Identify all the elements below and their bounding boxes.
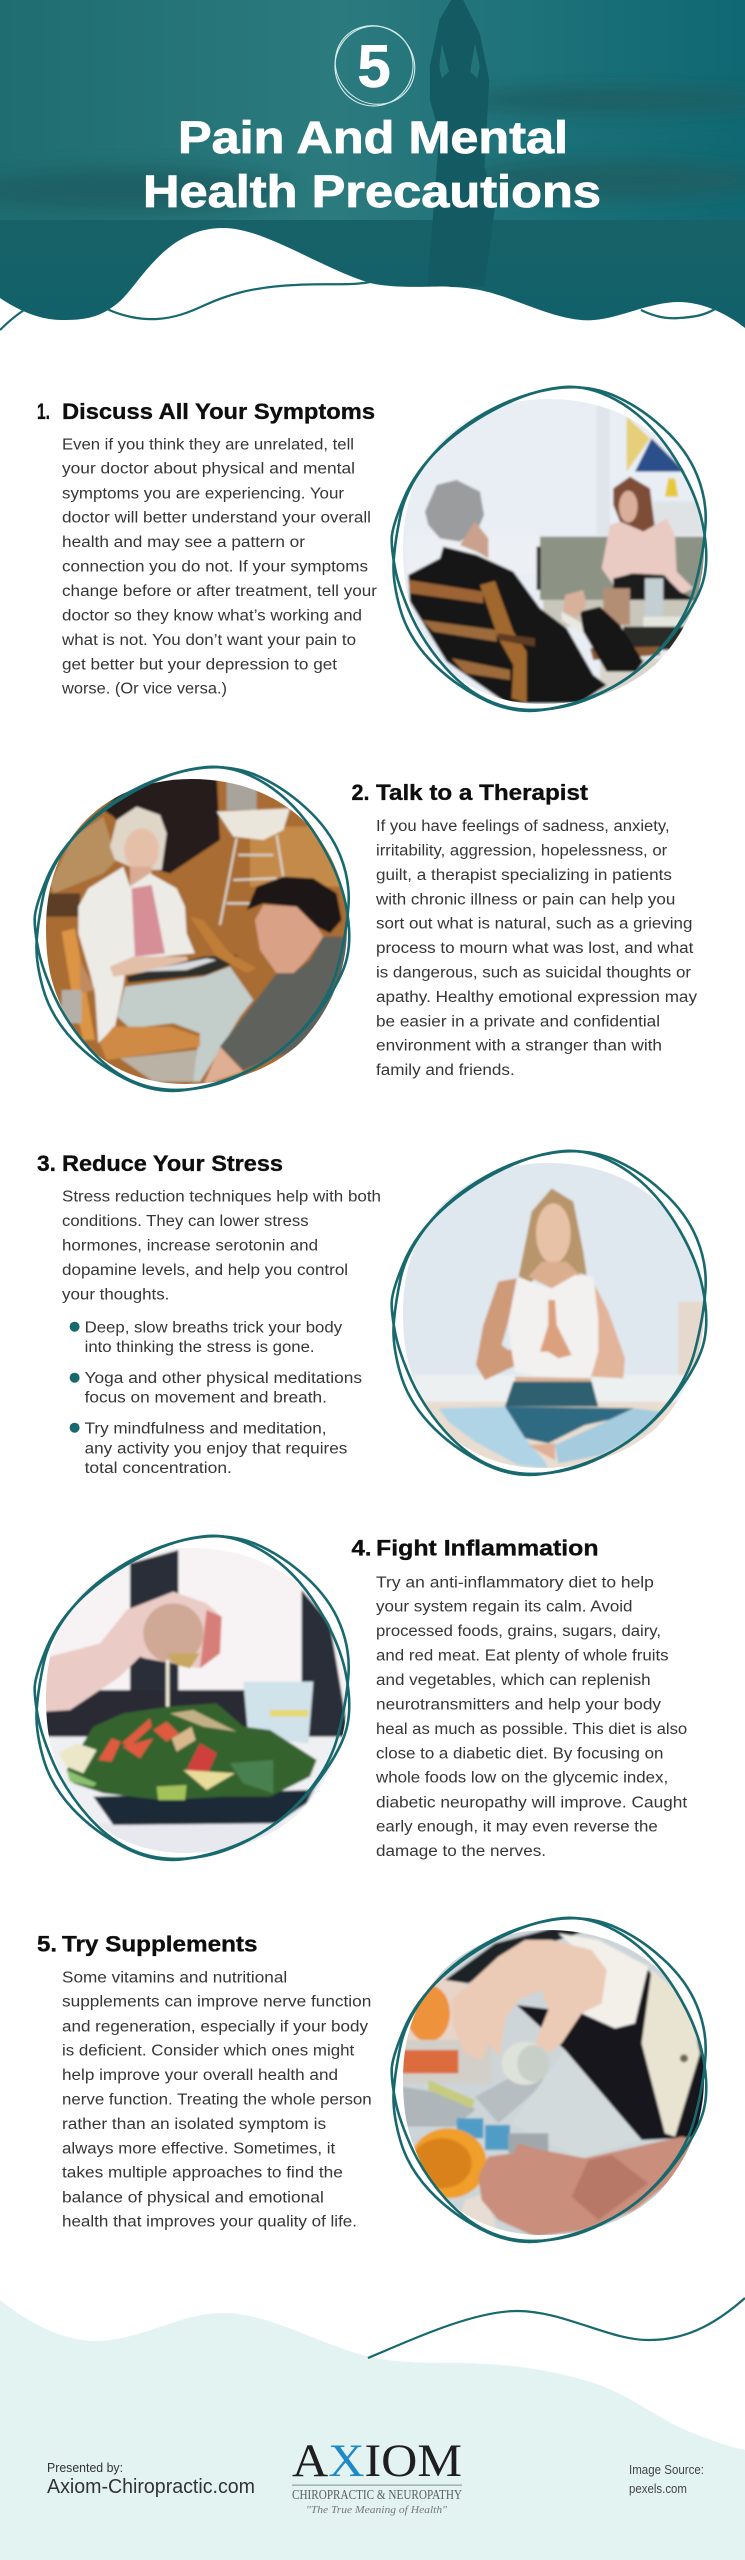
bullet list: focus on movement and breath.	[85, 1390, 327, 1407]
body text 4: heal as much as possible. This diet is also	[376, 1721, 687, 1738]
header photo background	[0, 0, 745, 345]
body text 5: Some vitamins and nutritional	[62, 1969, 287, 1986]
body text 2	[375, 818, 697, 1079]
logo: Axiom Chiropractic and Neuropathy	[292, 2435, 462, 2516]
heading 4: Fight Inflammation	[376, 1536, 599, 1561]
icon: number five in sketched circle: 5	[357, 33, 391, 100]
photo: two people in therapy consultation	[403, 399, 704, 704]
body text 1: Even if you think they are unrelated, tell	[62, 436, 354, 453]
title: Health Precautions	[143, 166, 601, 217]
body text 5: supplements can improve nerve function	[62, 1994, 371, 2011]
body text 1: doctor so they know what’s working and	[62, 607, 362, 624]
body text 4: neurotransmitters and help your body	[376, 1696, 661, 1713]
body text 1	[61, 436, 377, 698]
body text 5: help improve your overall health and	[62, 2067, 338, 2084]
bullet list	[70, 1319, 362, 1477]
body text 2: guilt, a therapist specializing in patients	[376, 867, 672, 884]
body text 1: health and may see a pattern or	[62, 534, 305, 551]
bullet list: Try mindfulness and meditation,	[85, 1421, 326, 1438]
body text 1: get better but your depression to get	[62, 656, 338, 673]
heading 5: 5.	[37, 1932, 57, 1957]
bullet list: Yoga and other physical meditations	[85, 1370, 362, 1387]
body text 3: Stress reduction techniques help with both	[62, 1189, 381, 1206]
decorative sketch rings around photo 2	[35, 767, 349, 1091]
body text 2: irritability, aggression, hopelessness, or	[376, 842, 667, 859]
body text 1: what is not. You don’t want your pain to	[61, 632, 356, 649]
bullet list: into thinking the stress is gone.	[85, 1339, 315, 1356]
photo: hand pouring dressing on salad	[46, 1548, 347, 1853]
logo: Axiom Chiropractic and Neuropathy: "The True Meaning of Health"	[306, 2504, 447, 2516]
body text 5: takes multiple approaches to find the	[62, 2165, 343, 2182]
body text 2: with chronic illness or pain can help you	[375, 891, 675, 908]
image source	[629, 2463, 704, 2496]
panel: 5 try supplements	[37, 1910, 718, 2250]
heading 4: 4.	[352, 1536, 372, 1561]
body text 4: diabetic neuropathy will improve. Caught	[376, 1794, 688, 1811]
image source: Image Source:	[629, 2463, 704, 2477]
wave accent lines	[0, 282, 715, 330]
body text 2: family and friends.	[376, 1062, 515, 1079]
body text 2: be easier in a private and confidential	[376, 1013, 660, 1030]
body text 5: balance of physical and emotional	[62, 2189, 324, 2206]
panel: footer	[0, 2298, 745, 2560]
body text 3: conditions. They can lower stress	[62, 1213, 309, 1230]
logo: Axiom Chiropractic and Neuropathy: AXIOM	[292, 2435, 462, 2487]
photo: therapist with patient	[46, 779, 347, 1084]
title: Pain And Mental	[178, 112, 568, 163]
body text 4	[375, 1574, 688, 1860]
body text 4: and vegetables, which can replenish	[376, 1672, 651, 1689]
body text 4: and red meat. Eat plenty of whole fruits	[376, 1648, 669, 1665]
title	[143, 112, 601, 217]
body text 4: close to a diabetic diet. By focusing on	[376, 1745, 663, 1762]
decorative sketch rings around photo 4	[35, 1536, 349, 1860]
heading 3: Reduce Your Stress	[62, 1151, 283, 1176]
body text 1: doctor will better understand your overall	[62, 510, 371, 527]
bullet list: total concentration.	[85, 1460, 232, 1477]
icon: number five in sketched circle	[319, 10, 431, 120]
body text 2: If you have feelings of sadness, anxiety,	[376, 818, 670, 835]
body text 2: process to mourn what was lost, and what	[376, 940, 694, 957]
body text 1: change before or after treatment, tell your	[62, 583, 377, 600]
image source: pexels.com	[629, 2482, 687, 2496]
body text 5: nerve function. Treating the whole person	[62, 2091, 372, 2108]
bullet list: Deep, slow breaths trick your body	[85, 1319, 342, 1336]
body text 3: hormones, increase serotonin and	[62, 1238, 318, 1255]
body text 4: damage to the nerves.	[376, 1843, 546, 1860]
body text 5: health that improves your quality of life.	[62, 2214, 357, 2231]
wave accent line	[368, 2298, 745, 2358]
heading 1: Discuss All Your Symptoms	[62, 399, 375, 424]
body text 2: apathy. Healthy emotional expression may	[376, 989, 697, 1006]
panel: 4 fight inflammation	[30, 1530, 688, 1870]
presented by	[47, 2460, 255, 2498]
decorative sketch rings around photo 1	[392, 387, 706, 711]
heading 1: 1.	[37, 399, 50, 424]
body text 5: is deficient. Consider which ones might	[62, 2043, 355, 2060]
body text 2: is dangerous, such as suicidal thoughts or	[376, 965, 691, 982]
panel: 2 talk to a therapist	[30, 760, 697, 1100]
panel: 1 discuss all your symptoms	[37, 375, 723, 722]
body text 1: worse. (Or vice versa.)	[61, 681, 227, 698]
footer wave background	[0, 2300, 745, 2560]
panel: header banner	[0, 0, 745, 350]
photo: hand dropping pills into palm	[403, 1930, 704, 2235]
heading 3: 3.	[37, 1151, 56, 1176]
body text 4: your system regain its calm. Avoid	[376, 1599, 632, 1616]
body text 4: early enough, it may even reverse the	[376, 1819, 658, 1836]
presented by: Axiom-Chiropractic.com	[47, 2476, 255, 2498]
presented by: Presented by:	[47, 2460, 123, 2475]
heading 2: 2.	[352, 780, 370, 805]
body text 5: always more effective. Sometimes, it	[62, 2140, 336, 2157]
body text 1: symptoms you are experiencing. Your	[62, 485, 344, 502]
body text 1: connection you do not. If your symptoms	[62, 559, 368, 576]
photo: woman meditating	[403, 1163, 704, 1468]
body text 3: dopamine levels, and help you control	[62, 1262, 348, 1279]
bullet list: any activity you enjoy that requires	[85, 1440, 348, 1457]
decorative sketch rings around photo 5	[392, 1918, 706, 2242]
heading 5: Try Supplements	[62, 1932, 258, 1957]
body text 2: environment with a stranger than with	[376, 1038, 662, 1055]
heading 2: Talk to a Therapist	[376, 780, 589, 805]
body text 3	[62, 1189, 381, 1303]
body text 1: your doctor about physical and mental	[62, 461, 355, 478]
body text 4: Try an anti-inflammatory diet to help	[376, 1574, 654, 1591]
body text 2: sort out what is natural, such as a grieving	[376, 916, 692, 933]
logo: Axiom Chiropractic and Neuropathy: CHIROPRACTIC & NEUROPATHY	[292, 2487, 462, 2502]
body text 5	[62, 1969, 372, 2231]
body text 3: your thoughts.	[62, 1286, 169, 1303]
body text 5: and regeneration, especially if your body	[62, 2018, 368, 2035]
body text 4: whole foods low on the glycemic index,	[375, 1770, 668, 1787]
body text 4: processed foods, grains, sugars, dairy,	[376, 1623, 661, 1640]
panel: 3 reduce your stress	[37, 1145, 718, 1485]
decorative sketch rings around photo 3	[392, 1151, 706, 1475]
wave: white header edge	[0, 228, 745, 350]
body text 5: rather than an isolated symptom is	[62, 2116, 326, 2133]
